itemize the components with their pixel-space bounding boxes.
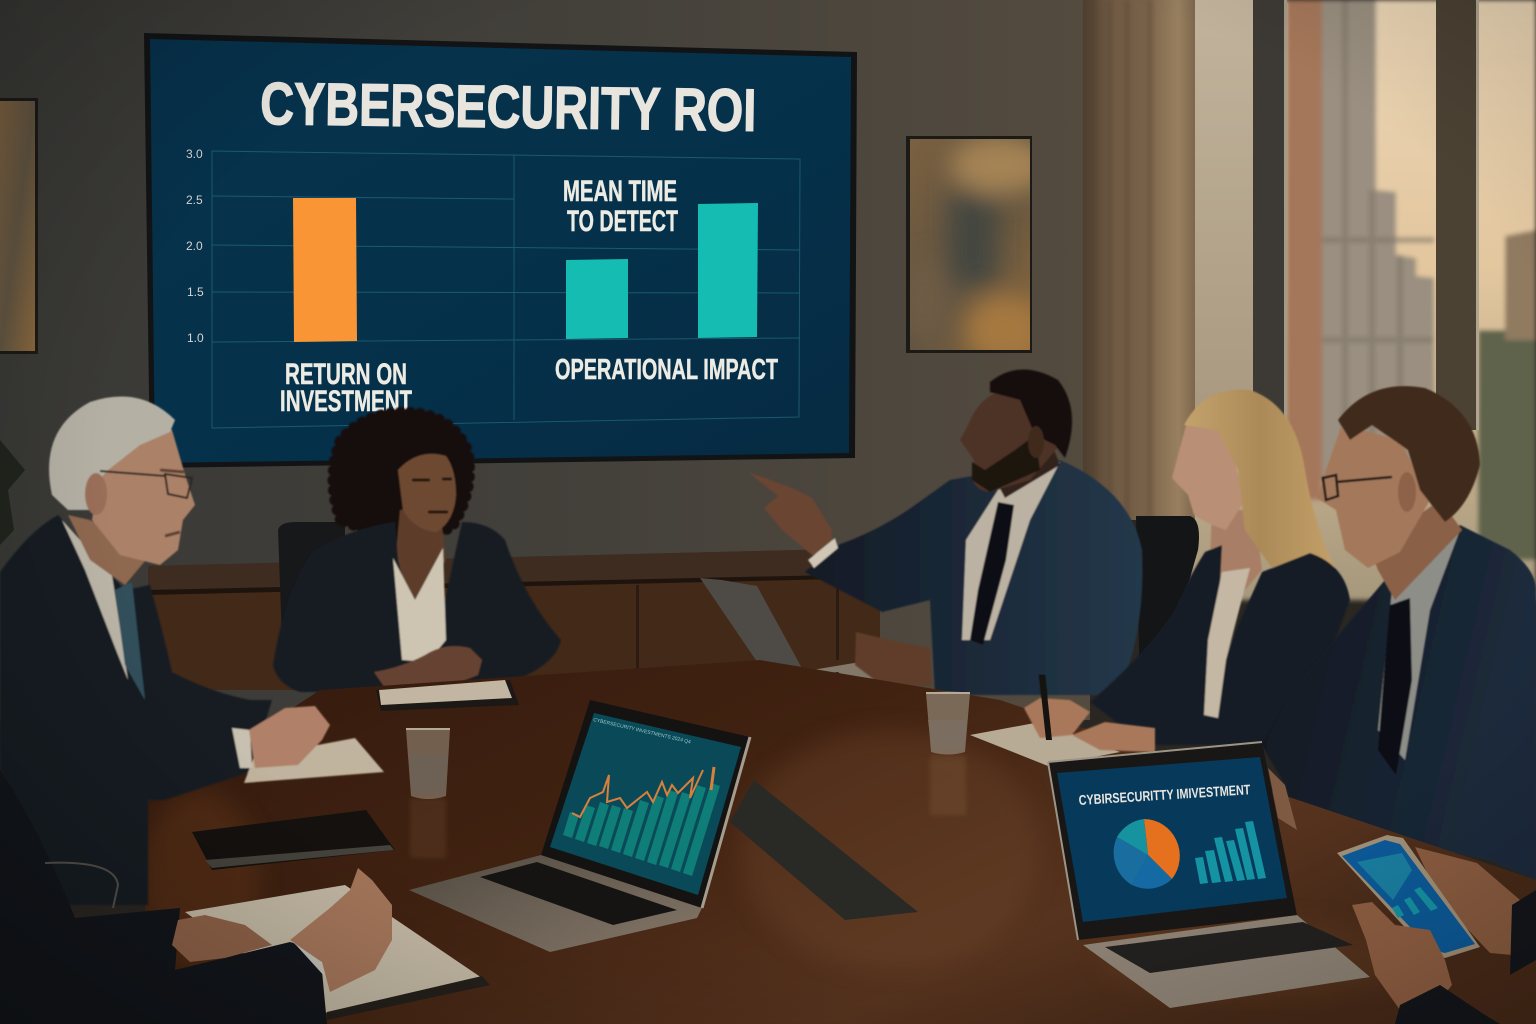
jacket [1090, 545, 1350, 745]
lid [541, 700, 750, 908]
dark table runner [730, 780, 918, 920]
silver lid edge [1048, 742, 1262, 940]
glasses [100, 471, 192, 498]
shirt and tie [62, 520, 128, 680]
woman in centre [273, 412, 561, 692]
pie chart [1114, 819, 1180, 889]
neck [1210, 510, 1262, 610]
black tablet [192, 810, 395, 870]
screen [550, 713, 741, 895]
hair [1184, 389, 1336, 580]
label: return on investment: RETURN ON [285, 358, 407, 391]
water glass left [406, 729, 450, 799]
curtain [1083, 0, 1195, 520]
plant [0, 440, 25, 545]
label: mean time to detect: MEAN TIME [563, 175, 677, 208]
title: CYBERSECURITY ROI [260, 70, 757, 144]
wall display [144, 33, 857, 468]
brow and mouth [160, 470, 184, 536]
table sheen and glass reflections [140, 730, 1420, 1000]
orange bar [293, 198, 357, 342]
base [409, 855, 702, 952]
blonde woman [1039, 389, 1350, 745]
face [960, 390, 1060, 492]
shirt cuff [808, 538, 838, 568]
eyes and mouth [412, 479, 452, 512]
suit [1262, 525, 1536, 880]
chair arm [45, 863, 118, 908]
display bezel [144, 33, 857, 468]
man pointing [748, 369, 1142, 695]
keyboard [1105, 922, 1353, 973]
base [1083, 915, 1370, 1008]
neck [68, 515, 150, 585]
pointing hand [748, 472, 832, 555]
older man [0, 396, 384, 905]
left wall art [0, 98, 38, 354]
suit [0, 515, 272, 905]
woman's hand on notebook [1072, 722, 1155, 752]
bar chart [1195, 821, 1266, 884]
phone screen [1342, 840, 1475, 953]
hair [990, 369, 1072, 458]
conference table [145, 660, 1536, 1024]
lid [1048, 742, 1297, 940]
back hand [1415, 847, 1520, 955]
teal bar short [566, 259, 628, 339]
pointing man laptop [700, 578, 918, 705]
beard [972, 435, 1040, 492]
suit [805, 460, 1142, 695]
wall background [0, 0, 1090, 720]
right laptop [1048, 742, 1370, 1008]
hair [49, 396, 175, 510]
y axis labels: 2.0 [186, 239, 203, 253]
y axis labels: 3.0 [186, 147, 203, 161]
notebook edge [327, 976, 490, 1020]
notebook centre-left [376, 680, 519, 711]
water glass right [926, 692, 970, 754]
hands [374, 646, 482, 692]
screen title: CYBIRSECURITTY IMIVESTMENT [1078, 781, 1251, 808]
phone bars [1392, 887, 1438, 918]
y axis labels [186, 147, 204, 345]
cuff [232, 728, 252, 768]
window view [1190, 0, 1536, 600]
chart frame and grid lines [212, 151, 800, 428]
notebook [185, 885, 482, 1013]
office chair left [278, 522, 345, 640]
shirt cuff [290, 940, 326, 978]
woman's pen [1039, 675, 1052, 740]
teal bars [563, 783, 720, 876]
face [1317, 425, 1430, 568]
centre laptop [409, 700, 750, 952]
neck [990, 440, 1060, 498]
phone panel [1357, 853, 1412, 900]
left hand [172, 915, 272, 962]
jacket [273, 522, 561, 692]
hair [1338, 386, 1480, 522]
face [92, 415, 195, 565]
blouse [1204, 568, 1250, 718]
neck [1370, 500, 1462, 600]
notebook under hand [244, 738, 384, 783]
ear [1398, 472, 1416, 512]
display screen [150, 39, 851, 463]
y axis labels: 2.5 [186, 193, 203, 207]
silver lid edge [702, 737, 750, 908]
credenza [148, 548, 880, 690]
label: return on investment [280, 358, 412, 418]
label: mean time to detect [563, 175, 678, 238]
office chair right [1136, 516, 1199, 690]
shirt and tie [1378, 530, 1460, 760]
screen [1057, 757, 1287, 922]
neck [395, 510, 446, 610]
blouse [393, 548, 446, 662]
right wall art [906, 136, 1032, 353]
man on right [1262, 386, 1536, 880]
screen title: CYBERSECURITY INVESTMENTS 2024 Q4 [593, 717, 691, 745]
label: operational impact: OPERATIONAL IMPACT [555, 354, 778, 386]
orange trend line [572, 770, 703, 817]
pen [1039, 675, 1052, 740]
y axis labels: 1.0 [187, 331, 204, 345]
right man wrist on table [1268, 768, 1297, 830]
phone [1337, 835, 1480, 958]
sleeves [1395, 890, 1536, 1024]
face [1172, 425, 1245, 530]
person in bottom left [0, 770, 490, 1024]
right hand [290, 868, 392, 992]
hair [332, 412, 470, 545]
y axis labels: 1.5 [187, 285, 204, 299]
notebook right [970, 722, 1120, 766]
shirt and tie [962, 462, 1060, 640]
ear [1028, 426, 1044, 458]
label: mean time to detect: TO DETECT [567, 205, 678, 238]
trend end mark [711, 767, 714, 790]
label: return on investment: INVESTMENT [280, 385, 412, 418]
hands with phone [1337, 835, 1536, 1024]
woman's writing hand [1024, 698, 1090, 738]
teal bar tall [698, 203, 758, 338]
window strip and frames [1193, 0, 1479, 500]
keyboard [480, 862, 677, 925]
hand [249, 706, 330, 768]
ear [85, 473, 107, 515]
front hand [1352, 902, 1452, 1010]
glasses [1323, 475, 1392, 500]
lower hand [855, 632, 932, 686]
body and sleeve [0, 770, 327, 1024]
face [398, 454, 456, 532]
